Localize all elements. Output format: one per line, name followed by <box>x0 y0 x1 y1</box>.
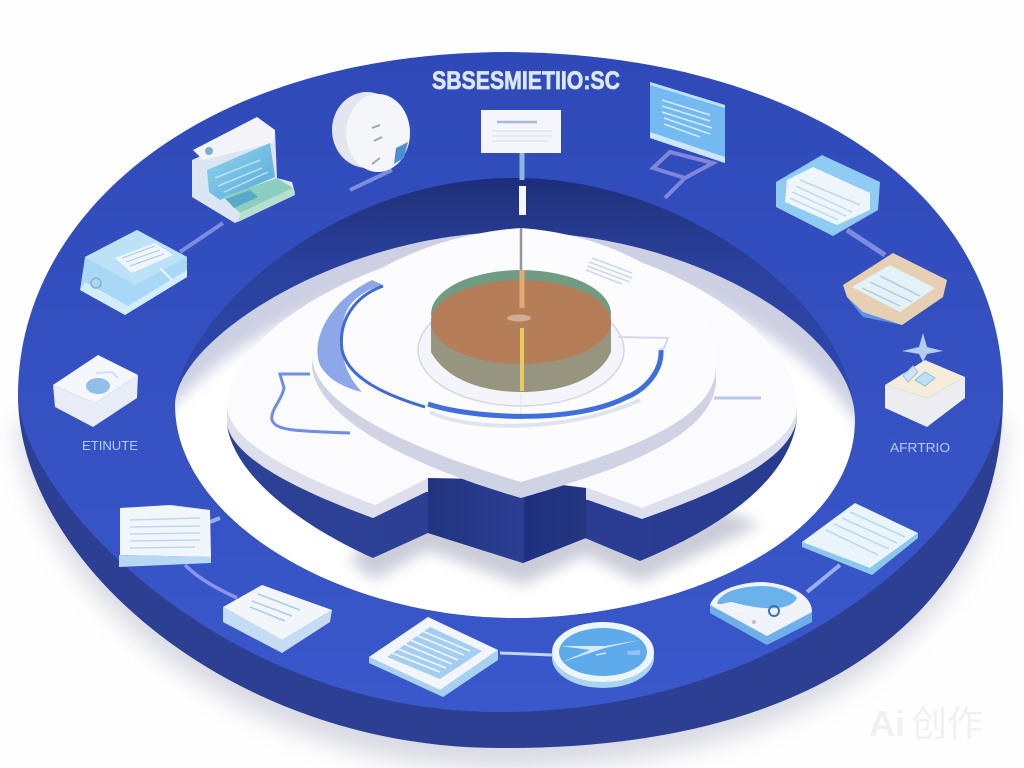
blue arc crescent <box>317 280 425 407</box>
ring drop shadow <box>18 420 1003 768</box>
central cylinder <box>431 270 611 392</box>
title: SBSESMIETIIO:SC <box>432 67 620 95</box>
outline glyph on left wing <box>272 374 350 433</box>
icon: storage box <box>80 230 187 315</box>
icon: laptop device <box>180 117 295 252</box>
icon: star box <box>885 333 965 427</box>
icon: top signboard <box>481 110 561 180</box>
cylinder body <box>431 318 611 392</box>
cylinder back wall <box>431 270 611 358</box>
white marker post <box>519 186 526 215</box>
panel: central well <box>160 178 870 640</box>
inner wall <box>175 178 855 618</box>
icon: gauge device <box>710 565 840 645</box>
icon: document tile <box>776 155 885 255</box>
line on right wing <box>714 396 761 400</box>
icon: disc device <box>332 92 410 190</box>
icon: note card <box>223 585 332 653</box>
text lines on upper tier <box>586 258 632 284</box>
upper tier surface <box>312 228 716 482</box>
icon: tablet <box>369 617 552 697</box>
platform dark base <box>227 405 797 563</box>
label: left: ETINUTE <box>82 438 138 453</box>
upper tier side <box>312 355 716 498</box>
blue arc band <box>428 350 661 426</box>
center marker <box>507 314 531 322</box>
label: right: AFRTRIO <box>890 440 950 455</box>
ring side wall <box>18 395 1003 748</box>
small bracket line <box>618 337 668 350</box>
vertical axis line <box>521 228 522 391</box>
watermark: Ai <box>869 703 905 744</box>
lower tier surface <box>227 228 797 508</box>
panel: central tiered platform <box>227 228 797 563</box>
upper tier seam <box>520 393 522 420</box>
lower tier side <box>227 405 797 519</box>
watermark: 创作 <box>911 703 983 744</box>
center block <box>428 478 586 563</box>
recess ring <box>418 294 624 406</box>
icon: paper tray <box>843 253 947 325</box>
icon: paper stack <box>119 505 237 598</box>
well floor <box>160 232 870 640</box>
cylinder brown top <box>431 280 611 364</box>
icon: circular dial <box>552 622 654 688</box>
icon: document sheet <box>802 503 918 575</box>
icon: screen panel <box>650 82 725 198</box>
watermark <box>869 703 983 744</box>
icon: white cube <box>53 355 138 427</box>
